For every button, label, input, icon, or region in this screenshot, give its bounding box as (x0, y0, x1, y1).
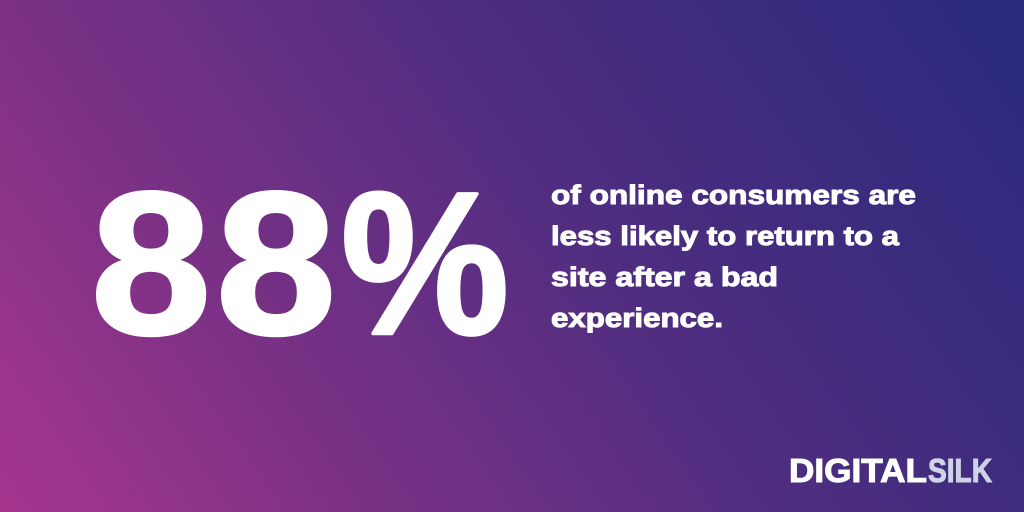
logo: Digital Silk (789, 452, 992, 489)
description text (551, 180, 916, 333)
description text: of online consumers are (551, 180, 916, 210)
description text: site after a bad (551, 262, 778, 292)
headline statistic (91, 150, 509, 378)
description text: experience. (551, 303, 723, 333)
headline statistic: 8 (91, 150, 211, 378)
headline statistic: 8 (216, 150, 336, 378)
logo: Digital Silk: DIGITAL (789, 452, 927, 489)
logo: Digital Silk: SILK (928, 452, 992, 489)
headline statistic: % (341, 150, 509, 378)
description text: less likely to return to a (551, 221, 900, 251)
